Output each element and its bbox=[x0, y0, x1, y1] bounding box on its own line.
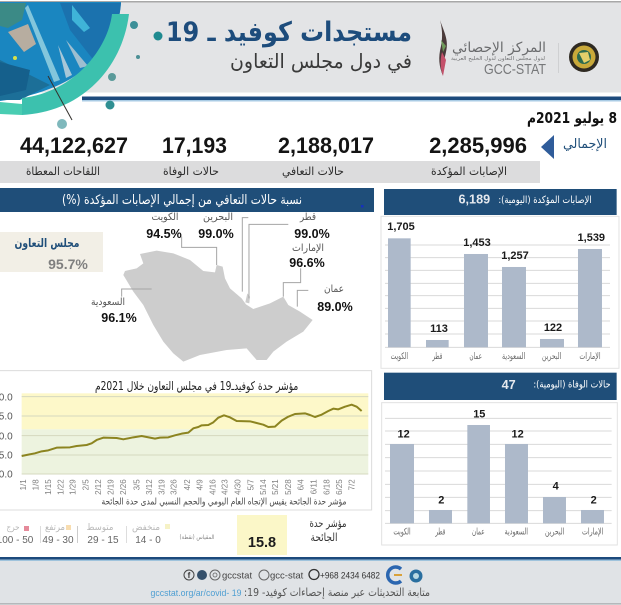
header decoration: teal arc with blue photo bbox=[0, 2, 162, 129]
label: Saudi Arabia: 96.1% bbox=[101, 311, 137, 325]
total: recoveries bbox=[278, 133, 374, 178]
x axis: 6/11 bbox=[310, 479, 319, 494]
title: مستجدات كوفيد ـ 19 bbox=[166, 17, 412, 48]
label: Qatar bbox=[294, 212, 330, 241]
x axis: 2/5 bbox=[82, 479, 91, 490]
label: Bahrain bbox=[198, 212, 234, 241]
total: vaccines: اللقاحات المعطاة bbox=[26, 164, 100, 178]
total: deaths bbox=[162, 133, 227, 179]
x axis: 6/4 bbox=[297, 479, 306, 490]
bar chart: قطر bbox=[435, 527, 445, 537]
panel: severity index line chart bbox=[0, 371, 372, 510]
x axis: 3/12 bbox=[145, 479, 154, 495]
x axis: 3/19 bbox=[157, 479, 166, 495]
bar chart: عمان bbox=[472, 527, 485, 537]
GCC average box bbox=[0, 232, 103, 272]
severity index label: مؤشر حدة bbox=[310, 517, 347, 530]
footer logos bbox=[388, 567, 422, 583]
subtitle: في دول مجلس التعاون bbox=[230, 49, 412, 74]
GCC-STAT logo: لدول مجلس التعاون لدول الخليج العربية bbox=[451, 56, 546, 62]
bar chart: الكويت bbox=[393, 527, 411, 537]
panel: recovery rate map bbox=[0, 188, 374, 362]
header band bbox=[0, 1, 621, 102]
bar chart bbox=[385, 408, 612, 538]
totals label: الإجمالي: الإجمالي bbox=[563, 137, 607, 152]
bar chart: البحرين bbox=[545, 527, 564, 537]
label: Kuwait: 94.5% bbox=[146, 227, 182, 241]
GCC average box: مجلس التعاون bbox=[14, 236, 80, 251]
total: deaths: 17,193 bbox=[162, 133, 227, 158]
x axis: 4/2 bbox=[183, 479, 192, 490]
x axis: 2/19 bbox=[106, 479, 115, 495]
bar chart: 1,453 bbox=[463, 237, 491, 249]
x axis: 5/14 bbox=[259, 479, 268, 495]
x axis: 2/26 bbox=[119, 479, 128, 495]
chart frame bbox=[381, 216, 619, 368]
total: confirmed cases bbox=[429, 133, 527, 179]
arrow bbox=[541, 135, 554, 159]
bar chart: 12 bbox=[398, 428, 410, 440]
heading: 6,189 bbox=[458, 193, 490, 207]
GCC-STAT logo bbox=[439, 20, 559, 78]
severity scale legend: 14 - 0 bbox=[135, 535, 161, 546]
date: 8 يوليو 2021م bbox=[527, 109, 617, 127]
label: Saudi Arabia bbox=[91, 297, 137, 325]
x axis: 4/9 bbox=[196, 479, 205, 490]
panel: daily deaths bbox=[382, 373, 617, 545]
severity scale legend: مرتفع bbox=[45, 523, 65, 533]
bar chart: 4 bbox=[553, 480, 560, 492]
label: Oman: 89.0% bbox=[317, 300, 353, 314]
x axis: 1/22 bbox=[56, 479, 65, 495]
bar chart: 2 bbox=[591, 495, 597, 507]
x axis: 1/29 bbox=[68, 479, 77, 495]
bar chart: السعودية bbox=[502, 351, 525, 361]
x axis: 6/18 bbox=[322, 479, 331, 495]
total: confirmed cases: 2,285,996 bbox=[429, 133, 527, 158]
severity scale legend: المقياس (نقطة) bbox=[180, 534, 215, 541]
bar chart: 122 bbox=[544, 322, 562, 334]
updates link line bbox=[150, 586, 430, 599]
total: vaccines: 44,122,627 bbox=[20, 133, 128, 158]
severity scale legend: متوسط bbox=[86, 523, 114, 533]
severity scale legend: حرج bbox=[6, 523, 20, 533]
GCC-STAT logo: المركز الإحصائي bbox=[452, 40, 546, 56]
severity bands bbox=[22, 393, 368, 474]
heading: الإصابات المؤكدة (اليومية): bbox=[498, 195, 592, 206]
x axis: 1/8 bbox=[31, 479, 40, 490]
x axis: 4/16 bbox=[208, 479, 217, 495]
social contacts: gccstat bbox=[222, 570, 252, 582]
x axis: 3/5 bbox=[132, 479, 141, 490]
severity scale legend: 49 - 30 bbox=[42, 535, 74, 546]
x axis: 5/28 bbox=[284, 479, 293, 495]
panel heading: نسبة حالات التعافي من إجمالي الإصابات المؤكدة (%) bbox=[62, 193, 302, 208]
severity score box: 15.8 bbox=[248, 535, 276, 551]
x axis: 6/25 bbox=[335, 479, 344, 495]
updates link line: متابعة التحديثات عبر منصة إحصاءات كوفيد- 19: bbox=[244, 586, 430, 599]
bar chart: 113 bbox=[430, 323, 448, 335]
total: vaccines bbox=[20, 133, 128, 178]
bar chart: عمان bbox=[469, 351, 482, 361]
heading bbox=[384, 189, 617, 215]
social contacts: +968 2434 6482 bbox=[320, 570, 380, 582]
label: Qatar: 99.0% bbox=[294, 227, 330, 241]
x axis: 5/7 bbox=[246, 479, 255, 490]
heading bbox=[384, 373, 617, 400]
bar chart: 1,539 bbox=[578, 232, 605, 244]
x axis: 7/2 bbox=[347, 479, 356, 490]
label: Qatar: قطر bbox=[299, 212, 316, 223]
bar chart: 15 bbox=[473, 408, 485, 420]
x axis: 4/23 bbox=[221, 479, 230, 495]
chart frame bbox=[382, 403, 617, 545]
footer bbox=[0, 557, 621, 605]
chart note: مؤشر حدة الجائحة يقيس الإتجاه العام اليومي والحجم النسبي لمدى حدة الجائحة bbox=[101, 497, 347, 507]
bar chart: السعودية bbox=[505, 527, 528, 537]
x axis: 5/21 bbox=[271, 479, 280, 495]
bar chart: البحرين bbox=[542, 351, 561, 361]
label: Kuwait: الكويت bbox=[152, 212, 178, 223]
label: UAE bbox=[289, 243, 325, 270]
panel heading bbox=[0, 188, 374, 212]
map of GCC bbox=[123, 251, 313, 362]
chart title: مؤشر حدة كوفيدـ19 في مجلس التعاون خلال 2021م bbox=[95, 379, 298, 394]
label: UAE: 96.6% bbox=[289, 256, 325, 270]
severity index label bbox=[310, 517, 347, 544]
map leader lines bbox=[122, 218, 308, 307]
GCC emblem bbox=[569, 42, 599, 72]
social contacts: f bbox=[188, 571, 191, 580]
line series bbox=[22, 405, 362, 456]
label: Bahrain: البحرين bbox=[203, 212, 233, 223]
panel: daily confirmed cases bbox=[381, 189, 619, 368]
bar chart: 1,705 bbox=[387, 221, 415, 233]
bar chart: 2 bbox=[438, 495, 444, 507]
total: deaths: حالات الوفاة bbox=[163, 164, 219, 179]
label: Bahrain: 99.0% bbox=[198, 227, 234, 241]
bar chart: قطر bbox=[432, 351, 442, 361]
y axis bbox=[0, 392, 13, 481]
bar chart: الكويت bbox=[391, 351, 408, 361]
bar chart: 1,257 bbox=[501, 250, 529, 262]
label: UAE: الإمارات bbox=[292, 243, 324, 254]
x axis bbox=[19, 479, 356, 495]
social contacts: gcc-stat bbox=[270, 570, 304, 582]
severity index label: الجائحة bbox=[310, 531, 338, 544]
severity scale legend bbox=[0, 523, 215, 546]
x axis: 2/12 bbox=[94, 479, 103, 495]
GCC average box: 95.7% bbox=[48, 256, 88, 272]
frame bbox=[0, 371, 372, 510]
x axis: 3/26 bbox=[170, 479, 179, 495]
updates link line: gccstat.org/ar/covid- 19 bbox=[150, 588, 242, 599]
total: confirmed cases: الإصابات المؤكدة bbox=[431, 164, 507, 179]
heading: 47 bbox=[502, 378, 516, 392]
severity scale legend: منخفض bbox=[132, 523, 160, 533]
totals label strip bbox=[0, 161, 540, 183]
bar chart: الإمارات bbox=[582, 527, 603, 538]
social contacts bbox=[184, 570, 380, 582]
severity score box bbox=[237, 515, 287, 555]
label: Oman bbox=[317, 284, 353, 314]
severity scale legend: 29 - 15 bbox=[87, 535, 119, 546]
total: recoveries: 2,188,017 bbox=[278, 133, 374, 158]
bar chart: الإمارات bbox=[579, 351, 601, 362]
bar chart bbox=[385, 221, 610, 362]
label: Saudi Arabia: السعودية bbox=[91, 297, 125, 308]
total: recoveries: حالات التعافي bbox=[282, 164, 344, 178]
x axis: 1/15 bbox=[44, 479, 53, 495]
GCC-STAT logo: GCC-STAT bbox=[484, 62, 546, 78]
x axis: 4/30 bbox=[233, 479, 242, 495]
bar chart: 12 bbox=[512, 428, 524, 440]
x axis: 1/1 bbox=[19, 479, 28, 490]
label: Oman: عمان bbox=[324, 284, 344, 295]
label: Kuwait bbox=[146, 212, 182, 241]
